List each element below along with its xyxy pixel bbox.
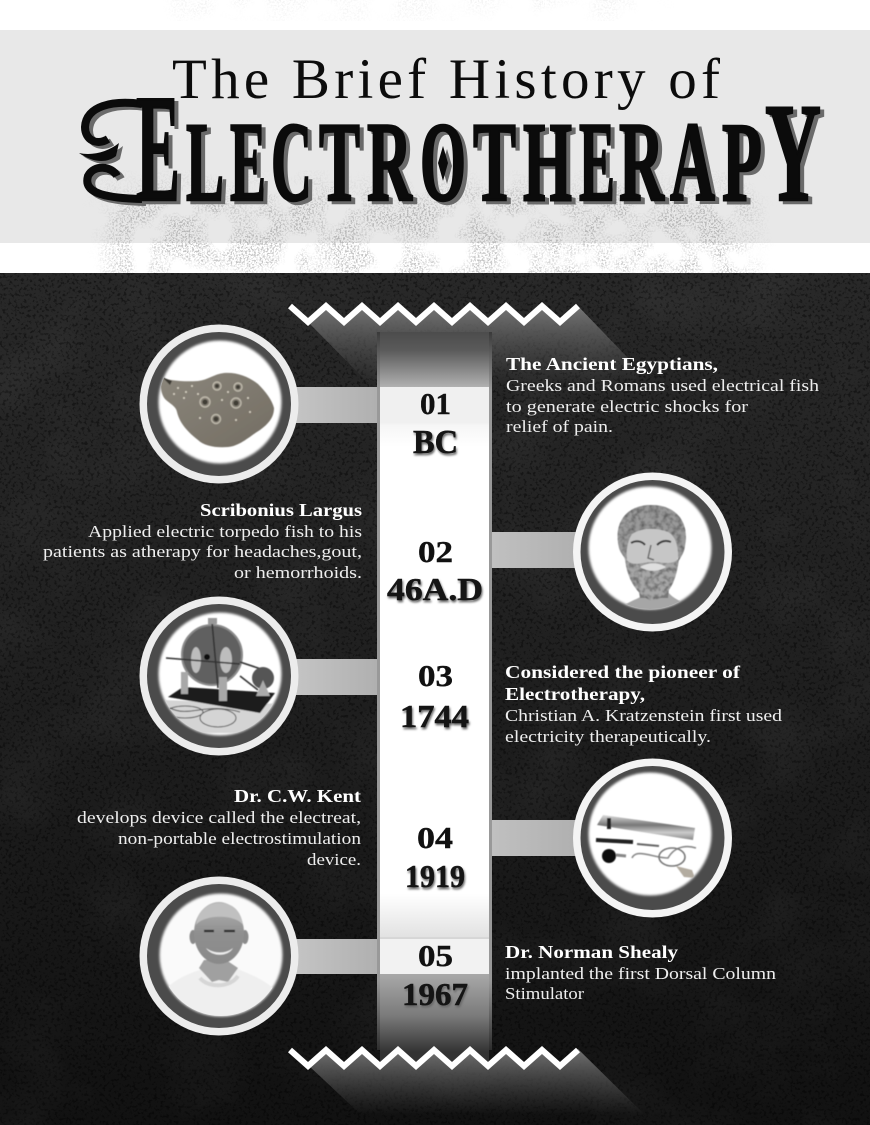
- bottom zigzag: [290, 1050, 578, 1066]
- title: Electrotherapy wordmark: R: [367, 100, 413, 225]
- central timeline column: [377, 332, 492, 1065]
- medallion 2: Greek bust: [573, 472, 732, 632]
- medallion 4: medical tools: [573, 758, 732, 918]
- entry 01 text: [506, 354, 820, 436]
- entry 02 text: Scribonius Largus: [200, 500, 362, 520]
- title: Electrotherapy wordmark: O: [420, 100, 466, 225]
- medallion 3: electrotherapy machine: [140, 596, 298, 756]
- medallion 5: Dr. Shealy portrait: [140, 876, 298, 1036]
- entry 03 date: 1744: [400, 698, 469, 734]
- icon: ray fish: [161, 373, 274, 447]
- entry 04 text: develops device called the electreat,: [77, 808, 361, 827]
- entry 02 text: [43, 500, 362, 582]
- top zigzag: [290, 306, 578, 322]
- entry 02 text: patients as atherapy for headaches,gout,: [43, 542, 362, 561]
- entry 04 text: non-portable electrostimulation: [118, 829, 361, 848]
- entry 01 date: BC: [413, 424, 458, 461]
- dark timeline panel: [0, 273, 870, 1125]
- header band: [0, 0, 870, 273]
- title: Electrotherapy wordmark: R: [619, 100, 665, 225]
- entry 05 text: [505, 942, 776, 1003]
- title: Electrotherapy wordmark: C: [271, 100, 312, 225]
- entry 02 date: 02: [418, 534, 453, 569]
- entry 02 date: 46A.D: [387, 571, 483, 607]
- connector bars: [296, 387, 576, 974]
- top fold shadow: [308, 306, 640, 392]
- entry 03 text: Christian A. Kratzenstein first used: [505, 706, 783, 725]
- entry 04 date: [405, 820, 465, 894]
- entry 03 text: Electrotherapy,: [505, 684, 645, 704]
- title: Electrotherapy wordmark: E: [136, 64, 180, 234]
- entry 03 text: Considered the pioneer of: [505, 662, 741, 682]
- bottom fold shadow: [308, 1049, 655, 1125]
- title: Electrotherapy wordmark: A: [670, 100, 715, 225]
- entry 02 text: or hemorrhoids.: [234, 563, 362, 582]
- entry 03 date: 03: [418, 658, 453, 693]
- entry 04 date: 1919: [405, 858, 465, 894]
- icon: machine: [160, 618, 283, 733]
- title: Electrotherapy wordmark: H: [523, 100, 572, 225]
- title: Electrotherapy wordmark: T: [473, 100, 516, 225]
- icon: man: [168, 902, 272, 1016]
- title: Electrotherapy wordmark: [79, 64, 821, 234]
- icon: tools: [596, 815, 696, 878]
- entry 04 text: Dr. C.W. Kent: [234, 786, 361, 806]
- entry 04 text: [77, 786, 361, 869]
- entry 01 date: [413, 386, 458, 461]
- entry 01 date: 01: [420, 386, 451, 421]
- title: Electrotherapy wordmark: Y: [765, 75, 821, 231]
- entry 01 text: to generate electric shocks for: [506, 397, 749, 416]
- entry 05 date: 1967: [402, 976, 468, 1012]
- title: Electrotherapy wordmark: E: [230, 100, 266, 225]
- title: Electrotherapy wordmark: P: [722, 100, 762, 225]
- title line: The Brief History of: [172, 48, 720, 111]
- entry 03 text: [505, 662, 783, 746]
- entry 05 date: 05: [418, 938, 453, 973]
- entry 05 text: implanted the first Dorsal Column: [505, 964, 776, 983]
- entry 03 text: electricity therapeutically.: [505, 727, 711, 746]
- entry 02 text: Applied electric torpedo fish to his: [88, 522, 362, 541]
- entry 03 date: [400, 658, 469, 734]
- medallion 1: torpedo fish: [140, 324, 298, 484]
- icon: bust: [616, 504, 687, 609]
- entry 05 date: [402, 938, 468, 1012]
- title: Electrotherapy wordmark: T: [319, 100, 360, 225]
- entry 01 text: Greeks and Romans used electrical fish: [506, 376, 820, 395]
- entry 05 text: Dr. Norman Shealy: [505, 942, 678, 962]
- entry 01 text: The Ancient Egyptians,: [506, 354, 718, 374]
- entry 05 text: Stimulator: [505, 984, 585, 1003]
- title: Electrotherapy wordmark: E: [579, 100, 615, 225]
- entry 02 date: [387, 534, 483, 607]
- entry 04 date: 04: [417, 820, 453, 855]
- entry 01 text: relief of pain.: [506, 417, 613, 436]
- title: Electrotherapy wordmark: L: [186, 100, 224, 225]
- entry 04 text: device.: [307, 850, 361, 869]
